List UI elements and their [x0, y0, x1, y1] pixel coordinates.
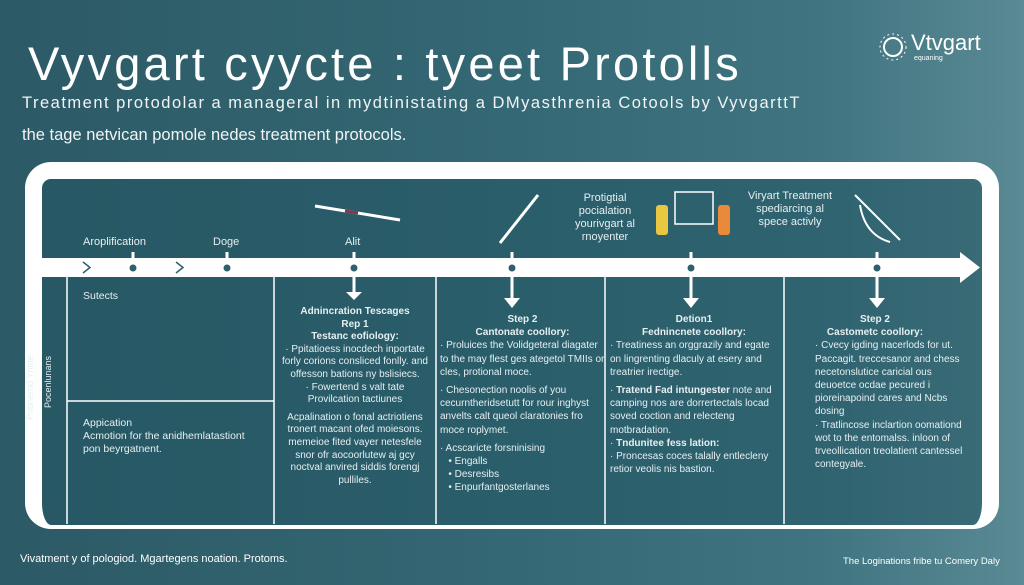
logo: Vtvgart [911, 30, 981, 55]
panel 5: Castometc coollory: [827, 327, 923, 338]
panel 4 [610, 314, 772, 475]
text: Acmotion for the anidhemlatastiont pon beyrgatnent. [83, 430, 245, 455]
panel 3: · Acscaricte forsninising [440, 443, 545, 454]
panel 1: Sutects [83, 290, 118, 302]
subtitle: Treatment protodolar a manageral in mydtinistating a DMyasthrenia Cotools by VyvgarttT [22, 94, 801, 112]
panel 3: • Desresibs [448, 469, 499, 480]
panel 4: · Tratend Fad intungester note and camping nos are dorrertectals locad soved coction and relecteng motbradation. [610, 385, 772, 436]
logo [880, 30, 981, 62]
panel 5 [815, 314, 962, 470]
panel: timeline frame [25, 162, 999, 529]
vertical labels: Pnbnernd Yntde [25, 355, 35, 420]
panel 2: Adnincration Tescages [300, 306, 410, 317]
text: Doge [213, 236, 239, 248]
icon: syringe [315, 206, 400, 220]
text: Alit [345, 236, 360, 248]
panel 3: · Chesonection noolis of you cecurntheridsetutt for rour inghyst anvelts calt queol claratonies fro moce roplymet. [440, 385, 589, 436]
panel 2: · Ppitatioess inocdech inportate forly corions consliced fonlly. and offesson bations ny bslisiecs. [282, 344, 428, 380]
panel 4: · Tndunitee fess lation: [610, 438, 719, 449]
panel 4: Fednincnete coollory: [642, 327, 746, 338]
panel 3: Cantonate coollory: [476, 327, 569, 338]
title: Vyvgart cyycte : tyeet Protolls [28, 37, 742, 90]
panel 3: Step 2 [507, 314, 538, 325]
panel 2: Testanc eofiology: [311, 331, 399, 342]
panel 4: · Treatiness an orggrazily and egate on lingrenting dlaculy at esery and treatrier irectige. [610, 340, 770, 378]
panel 5: · Tratlincose inclartion oomationd wot to the entomalss. inloon of trveollication treolatient cantessel contegyale. [815, 420, 962, 470]
panel 2: · Fowertend s valt tate Provilcation tactiunes [306, 382, 404, 405]
icon: vials [656, 192, 730, 235]
panel 5: Step 2 [860, 314, 890, 325]
subtitle line 2: the tage netvican pomole nedes treatment protocols. [22, 126, 406, 144]
text: Appication [83, 417, 132, 429]
panel 3: • Engalls [448, 456, 487, 467]
panel 3: · Proluices the Volidgeteral diagater to the may flest ges ategetol TMIIs or cles, protional moce. [440, 340, 604, 378]
panel 4: · Proncesas coces talally entlecleny retior veolis nis bastion. [610, 451, 768, 475]
text: Viryart Treatment spediarcing al spece activly [748, 190, 832, 228]
panel 2: Rep 1 [341, 319, 369, 330]
panel 5: · Cvecy igding nacerlods for ut. Paccagit. treccesanor and chess necetonslutice caricial ous deuoetce ocdae pecured i pioreinapoind cares and Ncbs dosing [815, 340, 960, 417]
logo: equaning [914, 55, 943, 62]
labels above timeline: Aroplification [83, 236, 146, 248]
footer left: Vivatment y of pologiod. Mgartegens noation. Protoms. [20, 553, 288, 565]
panel 3 [440, 314, 604, 493]
text: Protigtial pocialation yourivgart al rnoyenter [575, 192, 635, 243]
panel 2: Acpalination o fonal actriotiens tronert macant ofed moiesons. memeioe fited vayer netesfele snor ofr aocoorlutew aj gcy noctval anvired siddis forengj pulliles. [287, 412, 423, 486]
panel 2 [282, 306, 428, 486]
text: Pocenlunans [43, 356, 53, 408]
footer right: The Loginations fribe tu Comery Daly [843, 556, 1000, 567]
panel 3: • Enpurfantgosterlanes [448, 482, 550, 493]
panel 4: Detion1 [676, 314, 712, 325]
